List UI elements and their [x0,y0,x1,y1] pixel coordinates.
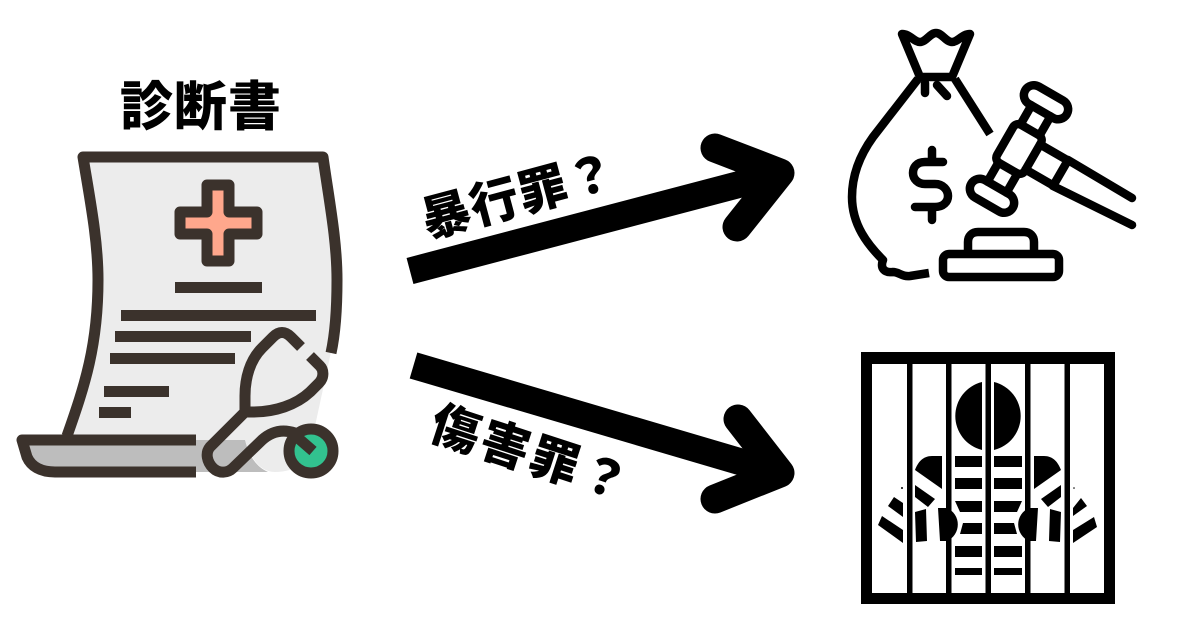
arrow: to injury charge [414,366,780,499]
paper outline [22,157,337,472]
stethoscope [207,332,333,473]
title: 診断書 [120,78,282,137]
gavel sound block [943,232,1059,277]
tray fill [22,440,268,472]
gavel [966,82,1132,228]
prisoner [878,382,1097,575]
icon: money bag and gavel [852,33,1132,277]
label: assault: 暴行罪？ [416,145,622,249]
text lines [99,282,316,418]
red cross [180,185,257,261]
money bag [852,33,990,276]
icon: medical certificate with stethoscope [22,157,337,473]
jail bars and frame [861,352,1115,604]
label: injury: 傷害罪？ [424,397,638,513]
icon: prisoner behind bars [861,352,1115,604]
arrow: to assault charge [410,148,780,271]
paper sheet fill [66,157,337,472]
